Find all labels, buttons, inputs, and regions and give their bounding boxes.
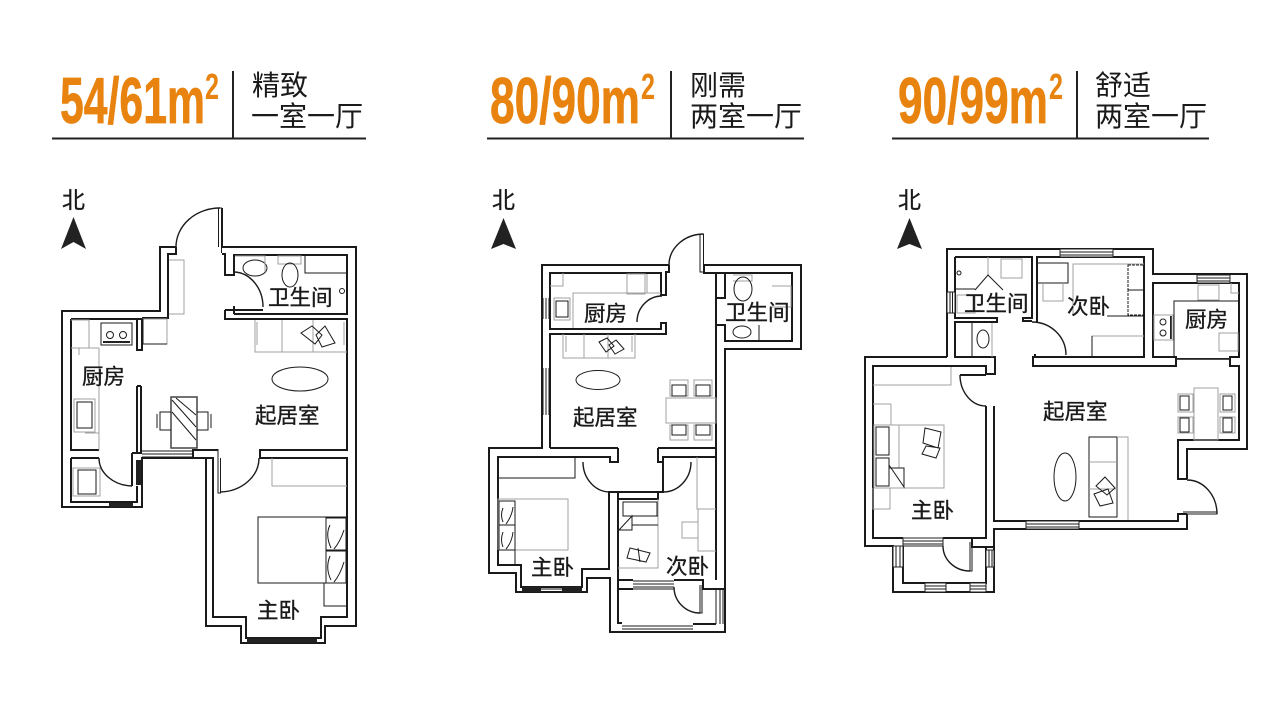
heading: 80/90 m2: 2 [641, 66, 655, 107]
heading: 80/90 m2: 80/90m [490, 64, 640, 137]
room labels: 卫生间 [964, 292, 1029, 316]
walls [62, 208, 356, 643]
floor plan 1: one bedroom [62, 208, 356, 643]
north arrow 3 [897, 187, 922, 249]
room labels [82, 286, 333, 623]
walls [489, 234, 801, 632]
door arcs [99, 208, 263, 492]
heading: 90/99 m2: 两室一厅 [1095, 101, 1207, 132]
room labels: 厨房 [82, 365, 125, 389]
room labels: 卫生间 [725, 301, 790, 325]
heading: 90/99 m2: 舒适 [1095, 70, 1151, 101]
north arrow 1: 北 [62, 187, 85, 213]
heading: 54/61 m2: 精致 [252, 70, 308, 101]
north arrow 2 [491, 187, 516, 249]
heading: 54/61 m2: 2 [205, 66, 219, 107]
north arrow 2: 北 [492, 187, 515, 213]
room labels [911, 292, 1228, 523]
room labels: 次卧 [1067, 295, 1110, 319]
floor plan 2: two bedrooms [489, 234, 801, 632]
door arcs [583, 234, 703, 613]
furniture [71, 256, 347, 606]
heading: 80/90 m2: 两室一厅 [690, 101, 802, 132]
heading: 54/61 m2: 一室一厅 [251, 101, 363, 132]
room labels: 厨房 [584, 302, 627, 326]
room labels: 主卧 [531, 556, 574, 580]
walls [865, 249, 1247, 592]
room labels: 厨房 [1185, 308, 1228, 332]
north arrow 1 [61, 187, 86, 249]
room labels: 起居室 [1043, 400, 1108, 424]
north arrow 3: 北 [898, 187, 921, 213]
heading: 90/99 m2: 90/99m [898, 64, 1048, 137]
furniture [498, 273, 791, 568]
floor plan 3: two bedrooms comfort [865, 249, 1247, 592]
room labels: 卫生间 [268, 286, 333, 310]
heading: 54/61 m2 [52, 64, 366, 138]
room labels: 次卧 [666, 555, 709, 579]
heading: 80/90 m2 [487, 64, 804, 138]
heading: 54/61 m2: 54/61m [60, 64, 205, 137]
heading: 90/99 m2 [892, 64, 1209, 138]
heading: 90/99 m2: 2 [1049, 66, 1063, 107]
room labels: 主卧 [911, 499, 954, 523]
door arcs [943, 322, 1217, 571]
room labels: 起居室 [255, 404, 320, 428]
room labels: 主卧 [257, 599, 300, 623]
furniture [873, 257, 1239, 520]
room labels [531, 301, 790, 580]
room labels: 起居室 [573, 406, 638, 430]
heading: 80/90 m2: 刚需 [690, 70, 746, 101]
